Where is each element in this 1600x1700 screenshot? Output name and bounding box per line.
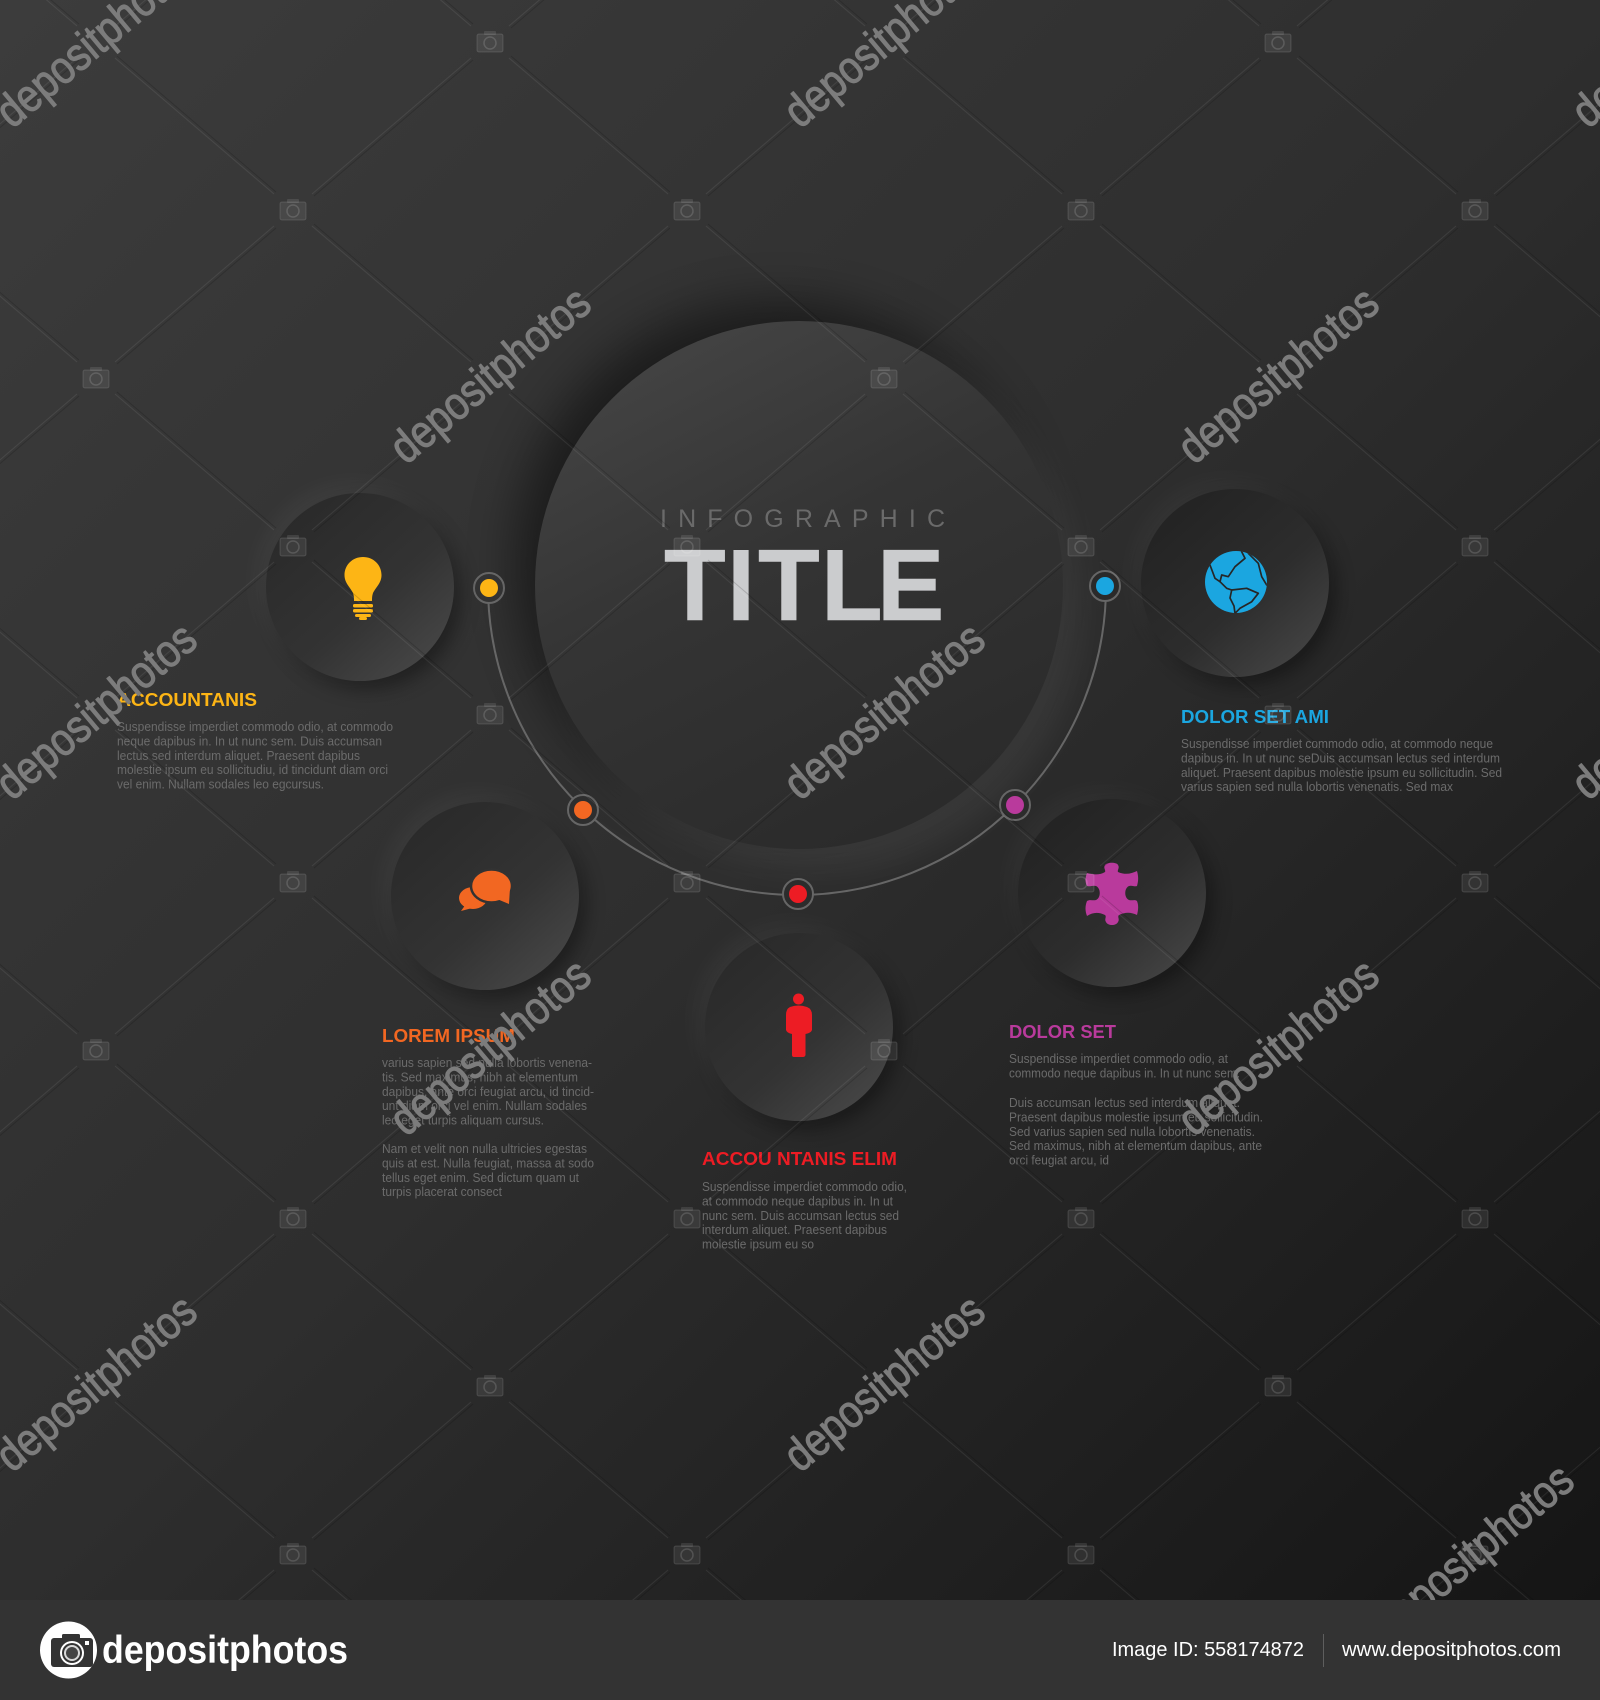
panel: dolor set ami bbox=[1134, 482, 1502, 794]
body text: quis at est. Nulla feugiat, massa at sodo bbox=[382, 1156, 594, 1170]
body text: Nam et velit non nulla ultricies egestas bbox=[382, 1142, 587, 1156]
body text bbox=[702, 1180, 907, 1252]
node: blue bbox=[1090, 571, 1120, 601]
node: red bbox=[783, 879, 813, 909]
body text: leo eget turpis aliquam cursus. bbox=[382, 1114, 544, 1128]
body text: at commodo neque dapibus in. In ut bbox=[702, 1194, 893, 1208]
circle: person bbox=[698, 926, 899, 1128]
body text: dapibus, ante orci feugiat arcu, id tincid- bbox=[382, 1085, 594, 1099]
body text: varius sapien sed nulla lobortis venenatis. Sed max bbox=[1181, 780, 1454, 794]
body text: Duis accumsan lectus sed interdum aliquet. bbox=[1009, 1096, 1240, 1110]
heading: DOLOR SET bbox=[1009, 1022, 1116, 1042]
node: purple bbox=[1000, 790, 1030, 820]
divider bbox=[1323, 1634, 1324, 1667]
website: www.depositphotos.com bbox=[1341, 1639, 1561, 1661]
heading: ACCOUNTANIS bbox=[117, 690, 257, 710]
body text: Suspendisse imperdiet commodo odio, at commodo neque bbox=[1181, 737, 1493, 751]
body text: unt diam orci vel enim. Nullam sodales bbox=[382, 1099, 587, 1113]
circle: globe bbox=[1134, 482, 1335, 684]
icon: puzzle piece bbox=[1086, 863, 1138, 925]
body text: lectus sed interdum aliquet. Praesent dapibus bbox=[117, 749, 360, 763]
connecting arc bbox=[488, 586, 1106, 895]
watermark text: depositphotos bbox=[379, 276, 600, 473]
body text: Sed varius sapien sed nulla lobortis venenatis. bbox=[1009, 1125, 1255, 1139]
watermark text: depositphotos bbox=[379, 948, 600, 1145]
body text bbox=[117, 720, 393, 792]
body text: tis. Sed maximus, nibh at elementum bbox=[382, 1070, 578, 1084]
image id: Image ID: 558174872 bbox=[1112, 1639, 1304, 1661]
body text bbox=[1181, 737, 1502, 794]
body text: vel enim. Nullam sodales leo egcursus. bbox=[117, 778, 324, 792]
icon: light bulb bbox=[344, 557, 382, 620]
title overline: INFOGRAPHIC bbox=[660, 505, 945, 533]
logo wordmark: depositphotos bbox=[102, 1629, 348, 1672]
panel: accou ntanis elim bbox=[698, 926, 907, 1252]
icon: speech bubbles bbox=[459, 870, 512, 911]
body text: tellus eget enim. Sed dictum quam ut bbox=[382, 1171, 579, 1185]
watermark text: depositphotos bbox=[1167, 276, 1388, 473]
body text: interdum aliquet. Praesent dapibus bbox=[702, 1223, 887, 1237]
body text: commodo neque dapibus in. In ut nunc sem. bbox=[1009, 1066, 1240, 1080]
body text: molestie ipsum eu sollicitudiu, id tincidunt diam orci bbox=[117, 763, 388, 777]
panel: lorem ipsum bbox=[382, 795, 594, 1199]
watermark text: depositphotos bbox=[1167, 948, 1388, 1145]
body text: Suspendisse imperdiet commodo odio, bbox=[702, 1180, 907, 1194]
body text: turpis placerat consect bbox=[382, 1185, 503, 1199]
heading: DOLOR SET AMI bbox=[1181, 707, 1329, 727]
panel: accountanis bbox=[117, 486, 460, 792]
body text: molestie ipsum eu so bbox=[702, 1238, 814, 1252]
watermark text: depositphotos bbox=[773, 1284, 994, 1481]
node: yellow bbox=[474, 573, 504, 603]
body text: Suspendisse imperdiet commodo odio, at commodo bbox=[117, 720, 393, 734]
circle: chat bbox=[384, 795, 585, 997]
body text: dapibus in. In ut nunc seDuis accumsan lectus sed interdum bbox=[1181, 751, 1500, 765]
icon: person bbox=[786, 994, 812, 1057]
body text bbox=[1009, 1052, 1263, 1168]
title bbox=[660, 505, 945, 642]
central title circle bbox=[515, 301, 1080, 869]
circle: puzzle bbox=[1011, 792, 1212, 994]
panel: dolor set bbox=[1009, 792, 1263, 1168]
body text: aliquet. Praesent dapibus molestie ipsum eu sollicitudin. Sed bbox=[1181, 766, 1502, 780]
footer bar bbox=[0, 1600, 1600, 1700]
circle: bulb bbox=[259, 486, 460, 688]
heading: ACCOU NTANIS ELIM bbox=[702, 1149, 897, 1169]
body text: Praesent dapibus molestie ipsum eu sollicitudin. bbox=[1009, 1110, 1263, 1124]
node: orange bbox=[568, 795, 598, 825]
body text: Sed maximus, nibh at elementum dapibus, ante bbox=[1009, 1139, 1262, 1153]
icon: globe bbox=[1205, 551, 1267, 613]
watermark text: depositphotos bbox=[773, 612, 994, 809]
body text: orci feugiat arcu, id bbox=[1009, 1154, 1109, 1168]
logo mark bbox=[40, 1622, 97, 1678]
body text bbox=[382, 1056, 594, 1199]
body text: Suspendisse imperdiet commodo odio, at bbox=[1009, 1052, 1228, 1066]
heading: LOREM IPSUM bbox=[382, 1026, 515, 1046]
title main word: TITLE bbox=[664, 530, 944, 642]
body text: neque dapibus in. In ut nunc sem. Duis accumsan bbox=[117, 734, 382, 748]
body text: varius sapien sed nulla lobortis venena- bbox=[382, 1056, 592, 1070]
body text: nunc sem. Duis accumsan lectus sed bbox=[702, 1209, 899, 1223]
